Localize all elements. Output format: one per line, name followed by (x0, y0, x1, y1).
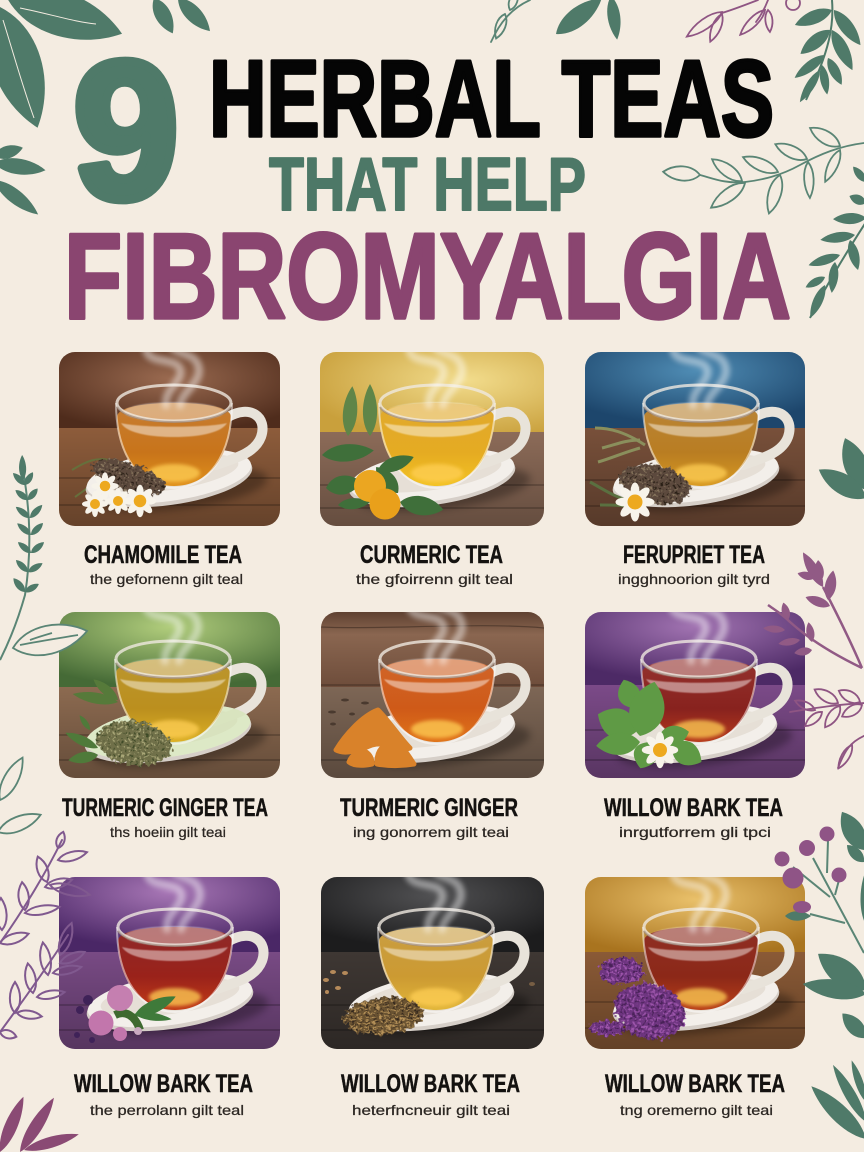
leaves: right lower green (801, 944, 864, 1043)
leaves: left green sprig (0, 455, 90, 662)
labels: row 2: ing gonorrem gilt teai (353, 824, 509, 840)
labels: row 1: FERUPRIET TEA (623, 541, 765, 569)
labels: row 1: ingghnoorion gilt tyrd (618, 571, 770, 587)
leaves: right outlined sprig (663, 123, 864, 215)
leaves: top left corner (0, 0, 216, 220)
labels: row 2: TURMERIC GINGER (340, 794, 518, 822)
labels: row 2: WILLOW BARK TEA (604, 794, 783, 822)
labels: row 3: the perrolann gilt teal (90, 1102, 244, 1118)
labels: row 2 (62, 794, 783, 840)
labels: row 3: tng oremerno gilt teai (620, 1102, 773, 1118)
panel: curmeric tea (320, 347, 544, 526)
labels: row 2: TURMERIC GINGER TEA (62, 794, 268, 822)
labels: row 3: WILLOW BARK TEA (341, 1070, 520, 1098)
leaves: left purple sprig lower (0, 921, 86, 1040)
leaves: right purple filled sprig (763, 550, 862, 668)
labels: row 1: CHAMOMILE TEA (84, 541, 242, 569)
labels: row 3: WILLOW BARK TEA (605, 1070, 785, 1098)
panel: willow bark tea amber (585, 871, 805, 1049)
labels: row 3: WILLOW BARK TEA (74, 1070, 253, 1098)
panel: ferupriet tea (585, 347, 805, 526)
leaves: left lower outlined sprig (0, 754, 43, 839)
title: that help: THAT HELP (269, 142, 586, 226)
labels: row 2: inrgutforrem gli tpci (619, 824, 771, 840)
leaves: right purple outlined sprig (790, 685, 864, 770)
leaves: top right green sprig (792, 0, 864, 105)
labels: row 1 (84, 541, 770, 587)
leaves: right flower buds sprig (774, 807, 864, 953)
panel: chamomile tea (59, 347, 280, 526)
labels: row 1: the gfoirrenn gilt teal (356, 571, 513, 587)
labels: row 1: CURMERIC TEA (360, 541, 503, 569)
panel: turmeric ginger tea orange (321, 603, 544, 778)
panel: willow bark tea dark (321, 871, 544, 1049)
leaves: bottom left purple (0, 1094, 80, 1152)
leaves: right green pair (814, 434, 864, 507)
panel: willow bark tea pink flowers (59, 871, 280, 1049)
leaves: top right purple sprig (684, 0, 800, 43)
leaves: top sprigs (491, 0, 623, 42)
leaves: right green sprig (804, 164, 864, 320)
panel: willow bark tea leaves (585, 603, 805, 778)
panel: turmeric ginger tea green (59, 603, 280, 778)
leaves: bottom right green (805, 1059, 864, 1145)
labels: row 2: ths hoeiin gilt teai (110, 824, 226, 840)
leaves: left purple sprig upper (0, 831, 91, 947)
title: number 9: 9 (73, 21, 179, 240)
labels: row 3: heterfncneuir gilt teai (352, 1102, 510, 1118)
labels: row 3 (74, 1070, 785, 1118)
labels: row 1: the gefornenn gilt teal (90, 571, 243, 587)
